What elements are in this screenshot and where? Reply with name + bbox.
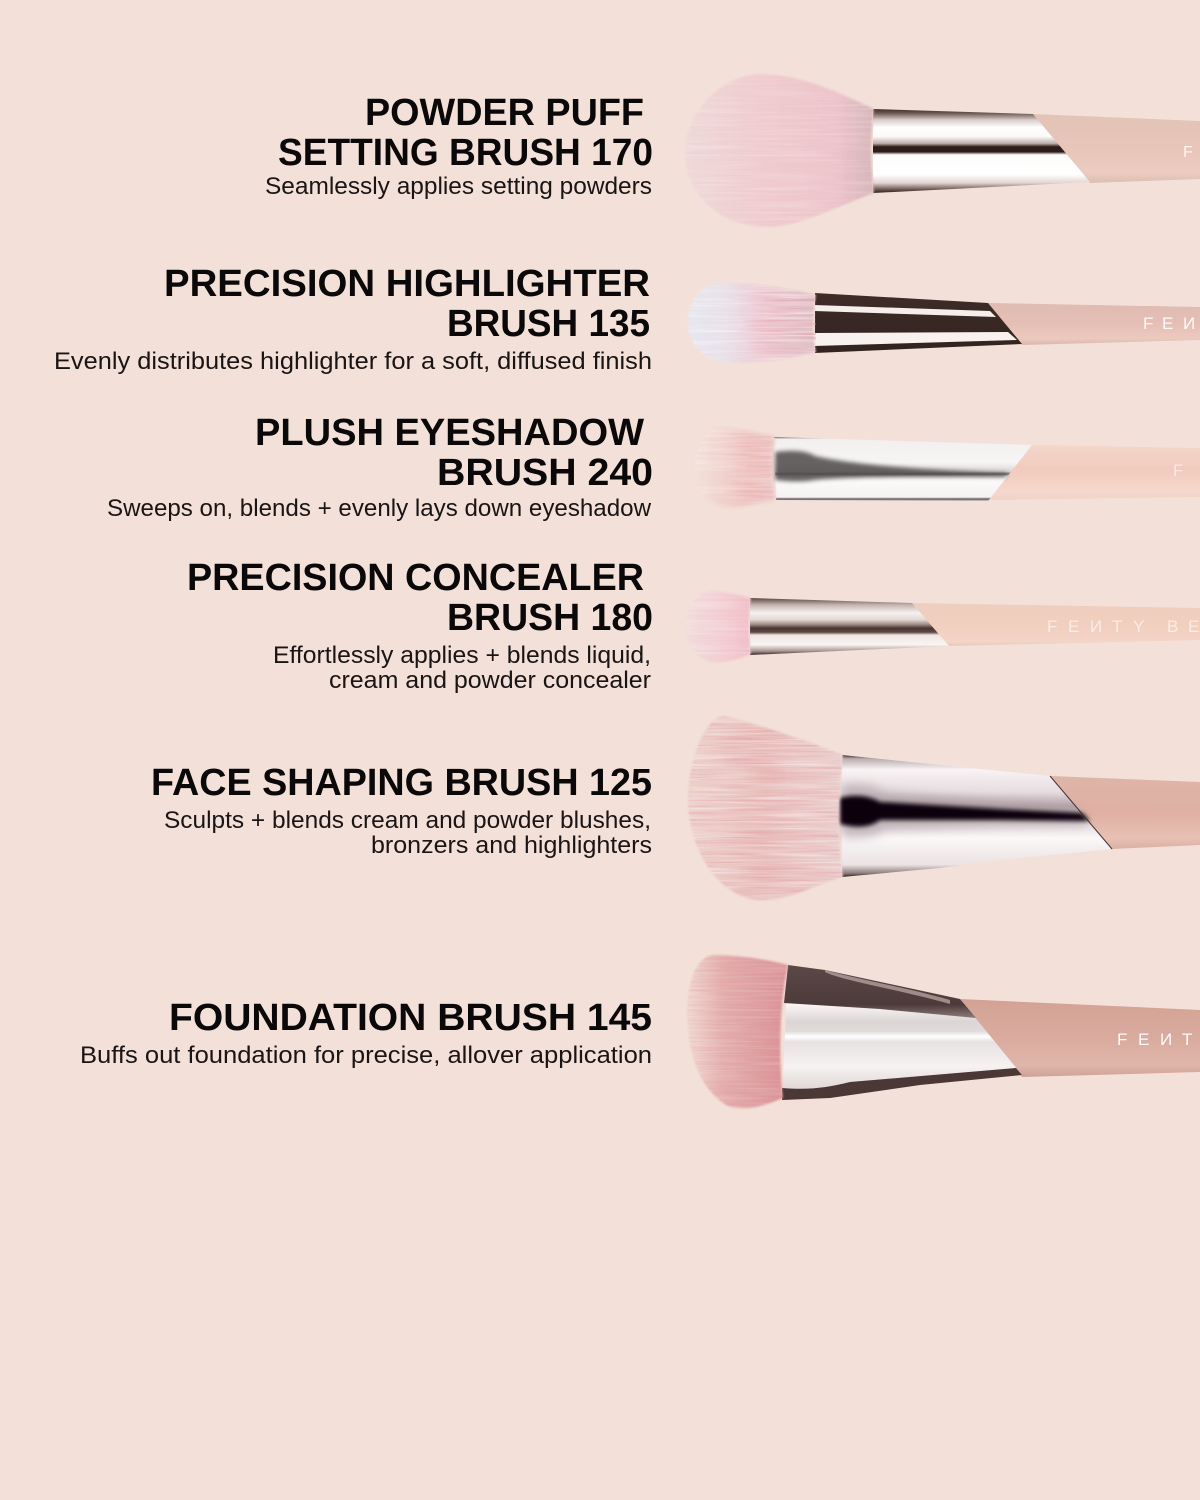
text block: precision concealer brush: PRECISION CONCEALER — [187, 557, 644, 599]
brush 180: precision concealer: FEИTYBE — [1047, 617, 1199, 636]
text block: precision concealer brush: cream and powder concealer — [329, 667, 651, 694]
brush 180: precision concealer — [685, 591, 1200, 663]
text block: plush eyeshadow brush: Sweeps on, blends + evenly lays down eyeshadow — [107, 495, 652, 522]
brush 240: plush eyeshadow — [695, 428, 1200, 507]
text block: face shaping brush: Sculpts + blends cream and powder blushes, — [164, 807, 651, 834]
brush 170: powder puff: F — [1183, 144, 1193, 161]
text block: plush eyeshadow brush: PLUSH EYESHADOW — [255, 412, 644, 454]
brush 125: face shaping — [688, 716, 1200, 900]
brush 135: precision highlighter — [688, 283, 1200, 363]
text block: precision highlighter brush: BRUSH 135 — [447, 303, 650, 345]
text block: powder puff setting brush: Seamlessly applies setting powders — [265, 173, 652, 200]
text block: foundation brush — [80, 997, 652, 1069]
text block: plush eyeshadow brush: BRUSH 240 — [437, 452, 653, 494]
text block: precision concealer brush: BRUSH 180 — [447, 597, 653, 639]
text block: precision concealer brush: Effortlessly applies + blends liquid, — [273, 642, 651, 669]
text block: powder puff setting brush — [265, 92, 653, 200]
text block: precision highlighter brush: PRECISION HIGHLIGHTER — [164, 263, 650, 305]
text block: face shaping brush — [151, 762, 652, 859]
text block: plush eyeshadow brush — [107, 412, 653, 522]
text block: powder puff setting brush: POWDER PUFF — [365, 92, 644, 134]
text block: precision highlighter brush: Evenly distributes highlighter for a soft, diffused finish — [54, 348, 652, 375]
text block: precision highlighter brush — [54, 263, 652, 375]
text block: powder puff setting brush: SETTING BRUSH 170 — [278, 132, 653, 174]
brush 240: plush eyeshadow: F — [1173, 461, 1183, 480]
brush 145: foundation: FEИT — [1117, 1030, 1192, 1049]
brush 145: foundation — [687, 955, 1200, 1108]
text block: foundation brush: FOUNDATION BRUSH 145 — [169, 997, 652, 1039]
text block: precision concealer brush — [187, 557, 653, 694]
brush 170: powder puff — [685, 74, 1200, 227]
brush 135: precision highlighter: FEИ — [1143, 314, 1195, 333]
text block: foundation brush: Buffs out foundation for precise, allover application — [80, 1042, 652, 1069]
text block: face shaping brush: bronzers and highlighters — [371, 832, 652, 859]
text block: face shaping brush: FACE SHAPING BRUSH 125 — [151, 762, 652, 804]
